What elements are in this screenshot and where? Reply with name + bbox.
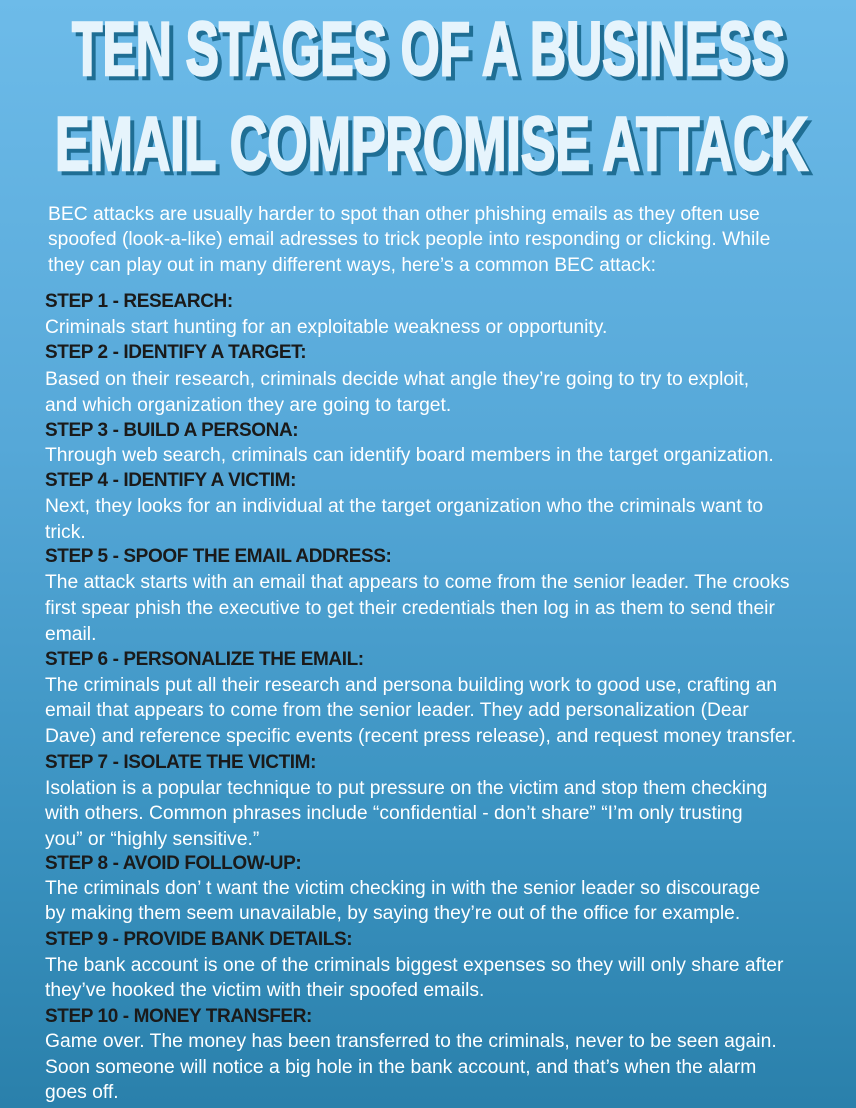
step 5: email. [45, 624, 96, 645]
step 4: trick. [45, 522, 86, 543]
step 5: The attack starts with an email that appears to come from the senior leader. The crooks [45, 572, 789, 593]
step 9 [45, 929, 784, 1001]
step 10: goes off. [45, 1082, 119, 1103]
step 6: STEP 6 - PERSONALIZE THE EMAIL: [45, 649, 364, 670]
step 7 [45, 752, 767, 850]
step 5: STEP 5 - SPOOF THE EMAIL ADDRESS: [45, 546, 391, 567]
step 8: by making them seem unavailable, by saying they’re out of the office for example. [45, 903, 740, 924]
intro text: they can play out in many different ways, here’s a common BEC attack: [48, 255, 656, 276]
step 4: Next, they looks for an individual at the target organization who the criminals want to [45, 496, 763, 517]
step 9: STEP 9 - PROVIDE BANK DETAILS: [45, 929, 352, 950]
step 6: email that appears to come from the senior leader. They add personalization (Dear [45, 700, 749, 721]
step 7: with others. Common phrases include “confidential - don’t share” “I’m only trusting [45, 803, 743, 824]
step 10: Soon someone will notice a big hole in the bank account, and that’s when the alarm [45, 1057, 756, 1078]
intro text: BEC attacks are usually harder to spot than other phishing emails as they often use [48, 204, 760, 225]
step 3: STEP 3 - BUILD A PERSONA: [45, 420, 298, 441]
step 2: STEP 2 - IDENTIFY A TARGET: [45, 342, 306, 363]
step 6: The criminals put all their research and persona building work to good use, crafting an [45, 675, 777, 696]
step 6: Dave) and reference specific events (recent press release), and request money transfer. [45, 726, 796, 747]
step 1: STEP 1 - RESEARCH: [45, 291, 233, 312]
step 7: Isolation is a popular technique to put pressure on the victim and stop them checking [45, 778, 767, 799]
step 5 [45, 546, 789, 645]
step 1: Criminals start hunting for an exploitable weakness or opportunity. [45, 317, 607, 338]
step 10: Game over. The money has been transferred to the criminals, never to be seen again. [45, 1031, 777, 1052]
step 2: and which organization they are going to target. [45, 395, 451, 416]
step 4 [45, 470, 763, 543]
step 10: STEP 10 - MONEY TRANSFER: [45, 1006, 312, 1027]
step 6 [45, 649, 796, 747]
step 9: The bank account is one of the criminals biggest expenses so they will only share after [45, 955, 783, 976]
step 4: STEP 4 - IDENTIFY A VICTIM: [45, 470, 296, 491]
intro text: spoofed (look-a-like) email adresses to trick people into responding or clicking. While [48, 229, 770, 250]
step 2: Based on their research, criminals decide what angle they’re going to try to exploit, [45, 369, 749, 390]
step 8: STEP 8 - AVOID FOLLOW-UP: [45, 853, 301, 874]
step 8: The criminals don’ t want the victim checking in with the senior leader so discourage [45, 878, 760, 899]
step 7: STEP 7 - ISOLATE THE VICTIM: [45, 752, 316, 773]
step 1 [45, 291, 607, 338]
step 3 [45, 420, 774, 466]
title [55, 7, 814, 190]
step 10 [45, 1006, 777, 1103]
step 9: they’ve hooked the victim with their spoofed emails. [45, 980, 484, 1001]
step 2 [45, 342, 749, 416]
step 3: Through web search, criminals can identify board members in the target organization. [45, 445, 774, 466]
step 8 [45, 853, 760, 924]
intro text [48, 204, 770, 276]
step 5: first spear phish the executive to get their credentials then log in as them to send their [45, 598, 775, 619]
step 7: you” or “highly sensitive.” [45, 829, 259, 850]
